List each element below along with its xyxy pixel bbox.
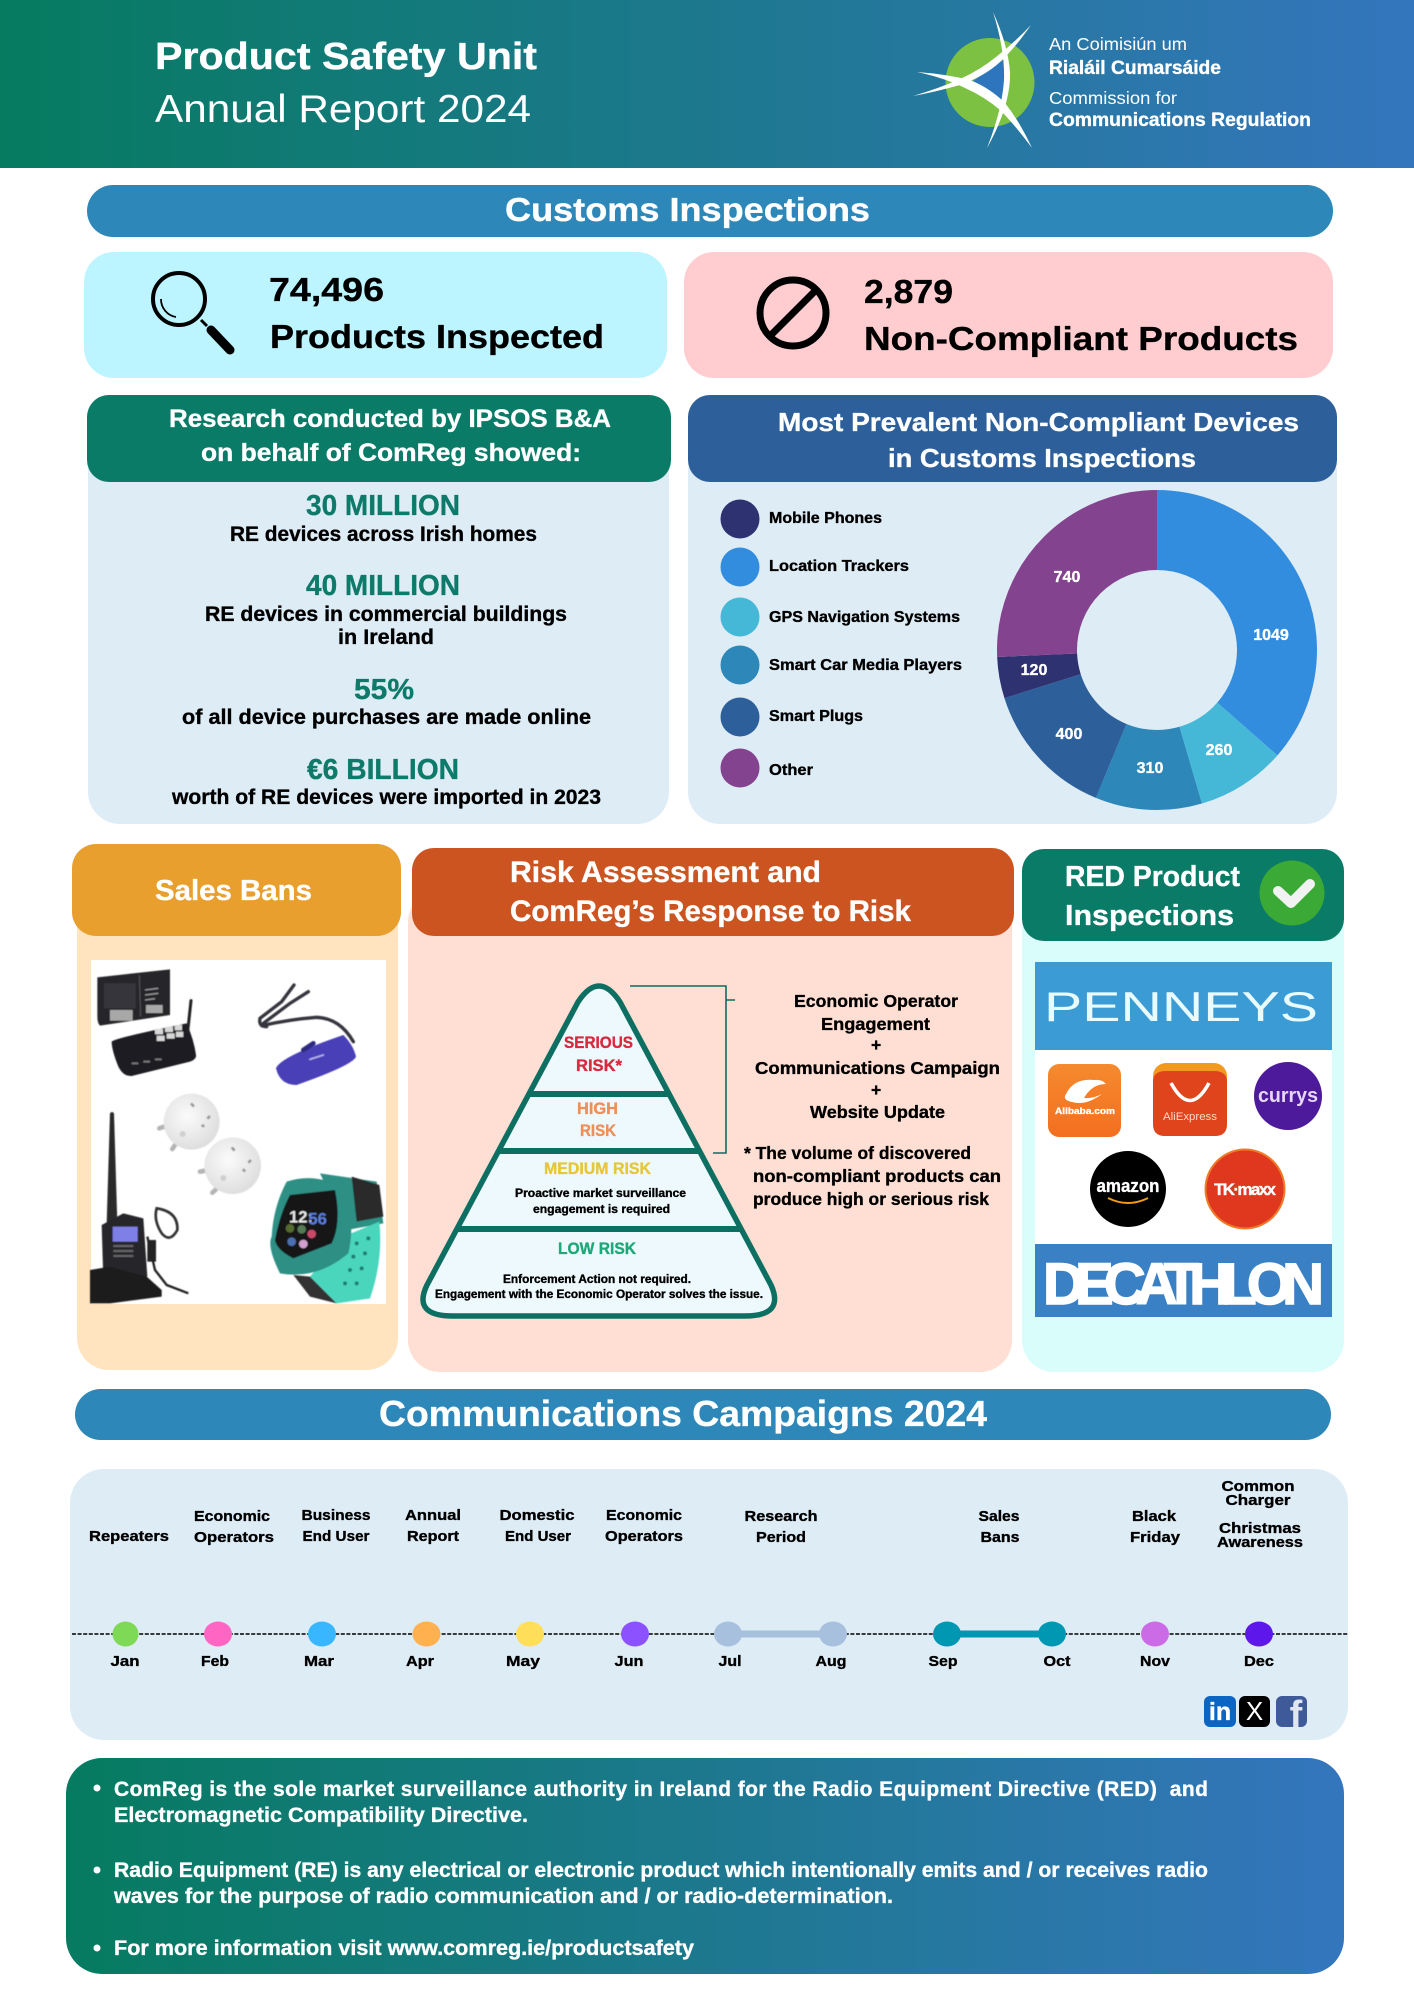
campaign labels: Economic [606,1507,682,1524]
risk response text: Communications Campaign [755,1058,1000,1078]
stat: 6 billion: €6 BILLION [307,754,459,786]
panel: most prevalent devices [688,395,1337,824]
campaign labels: Domestic [500,1507,574,1524]
campaign labels: Repeaters [89,1528,169,1545]
campaign labels: Report [407,1528,459,1545]
product photo collage [90,960,386,1304]
devices heading: Most Prevalent Non-Compliant Devices [778,407,1299,437]
stat: 6 billion [171,754,601,809]
bracket [630,986,735,1153]
icon: purple tracker with cable [260,985,356,1085]
campaign labels: Operators [605,1528,683,1545]
logo: Penneys [1035,962,1332,1050]
stat: 40 million [205,570,567,649]
section heading: Customs Inspections [87,185,1333,237]
logo: TK Maxx: TK·maxx [1214,1180,1277,1199]
serious risk [564,1034,633,1075]
title: Product Safety Unit [155,36,537,78]
social icons: in [1209,1698,1231,1726]
stat: 30 million: RE devices across Irish homes [230,523,537,546]
RED heading [1022,849,1344,941]
campaign labels: Period [756,1529,806,1546]
campaign labels: Black [1132,1508,1177,1525]
risk response text: + [871,1080,881,1100]
donut chart: 1049 [1253,627,1289,644]
month labels: Mar [304,1653,334,1670]
bullet: sole authority: Electromagnetic Compatibility Directive. [114,1804,528,1827]
icon: smart plugs [159,1094,261,1194]
medium risk: MEDIUM RISK [544,1160,651,1178]
legend: Mobile Phones [769,510,882,527]
logo: Penneys: PENNEYS [1044,983,1318,1030]
panel: campaign timeline [70,1469,1348,1740]
risk heading [412,848,1014,936]
campaign labels: Economic [194,1508,270,1525]
risk response text [755,991,1000,1122]
legend: Smart Car Media Players [769,657,962,674]
campaign labels: Business [302,1507,370,1524]
bullet: radio equipment definition: waves for the purpose of radio communication and / or radio-determination. [113,1885,893,1908]
devices heading [688,395,1337,482]
legend: Other [769,762,813,779]
risk response text: Engagement [821,1014,930,1034]
social icons [1204,1694,1307,1736]
campaign labels: End User [302,1528,370,1545]
subtitle: Annual Report 2024 [155,88,531,131]
research heading: Research conducted by IPSOS B&A [169,405,611,433]
RED heading: RED Product [1065,861,1241,893]
month labels [110,1653,1274,1670]
research heading: on behalf of ComReg showed: [201,439,581,467]
logo: Currys: currys [1258,1085,1318,1107]
month labels: Jul [718,1653,742,1670]
social icons: X [1246,1696,1263,1726]
stat: 40 million: 40 MILLION [306,570,460,602]
medium risk [515,1160,686,1216]
stat: 55 percent [182,674,591,729]
campaign labels: Research [744,1508,818,1525]
stat: 30 million [230,490,537,546]
icon: handheld radio [90,1112,188,1303]
month labels: Apr [406,1653,434,1670]
section heading: Communications Campaigns [75,1389,1331,1440]
timeline markers [112,1622,1273,1646]
month labels: Feb [201,1653,229,1670]
stat: 55 percent: 55% [354,674,414,706]
campaign labels: Awareness [1217,1534,1303,1551]
logo wordmark [1049,34,1311,131]
risk footnote: produce high or serious risk [753,1189,989,1209]
stat card: products inspected [84,252,667,378]
retailer logos [1035,962,1332,1317]
risk footnote [744,1143,1001,1209]
serious risk: SERIOUS [564,1034,633,1052]
logo: Currys [1254,1062,1322,1130]
low risk: LOW RISK [558,1240,636,1258]
research heading [87,395,671,482]
stat: 40 million: in Ireland [338,626,434,649]
low risk: Engagement with the Economic Operator solves the issue. [435,1289,763,1301]
stat: 30 million: 30 MILLION [306,490,460,522]
section heading: Customs Inspections: Customs Inspections [505,191,870,228]
campaign labels: Operators [194,1529,274,1546]
month labels: May [506,1653,541,1670]
low risk: Enforcement Action not required. [503,1274,691,1286]
donut chart: 310 [1137,760,1163,777]
stat card: non-compliant products: Non-Compliant Products [864,320,1298,357]
section heading: Communications Campaigns: Communications Campaigns 2024 [379,1393,987,1434]
logo: Amazon: amazon [1096,1176,1160,1196]
logo wordmark: An Coimisiún um [1049,34,1187,54]
month labels: Sep [928,1653,958,1670]
sales bans heading [72,844,401,936]
stat card: products inspected: Products Inspected [270,318,604,355]
icon: magnifying glass [153,273,230,350]
RED heading: Inspections [1065,900,1234,932]
campaign labels: Sales [978,1508,1020,1525]
campaign labels: Common [1222,1478,1294,1495]
campaign labels: Christmas [1219,1520,1301,1537]
icon: kids smartwatch: 56 [308,1209,327,1228]
logo: Alibaba [1048,1064,1121,1137]
donut chart: 120 [1021,662,1047,679]
stat card: products inspected: 74,496 [269,271,384,308]
logo: Amazon [1090,1151,1166,1227]
header banner [0,0,1414,168]
bullet: sole authority: ComReg is the sole market surveillance authority in Ireland for the Radio Equipment Directive (RED) and [114,1778,1208,1801]
logo wordmark: Rialáil Cumarsáide [1049,58,1221,79]
risk heading: Risk Assessment and [510,856,821,889]
campaign labels: End User [505,1528,571,1545]
sales bans heading: Sales Bans [155,875,312,907]
campaign labels: Bans [980,1529,1020,1546]
risk response text: Economic Operator [794,991,958,1011]
stat: 55 percent: of all device purchases are made online [182,706,591,729]
risk pyramid [423,986,775,1316]
high risk [577,1100,618,1140]
campaign labels: Annual [405,1507,461,1524]
high risk: RISK [580,1122,616,1140]
month labels: Jun [614,1653,644,1670]
devices heading: in Customs Inspections [888,443,1196,473]
serious risk: RISK* [576,1057,623,1075]
high risk: HIGH [577,1100,618,1118]
panel: RED product inspections [1022,849,1344,1372]
panel: key information [66,1758,1344,1974]
campaign labels: Friday [1130,1529,1181,1546]
logo: Alibaba: Alibaba.com [1055,1106,1115,1117]
risk footnote: non-compliant products can [753,1166,1001,1186]
month labels: Oct [1044,1653,1070,1670]
icon: intercom units [97,969,196,1076]
timeline line [72,1633,1348,1635]
social icons: f [1290,1694,1303,1736]
panel: risk assessment [408,848,1014,1372]
stat: 40 million: RE devices in commercial buildings [205,603,567,626]
icon: prohibition sign [760,280,826,346]
campaign labels: Charger [1226,1492,1291,1509]
logo wordmark: Commission for [1049,88,1177,108]
bullet: more information: For more information visit www.comreg.ie/productsafety [114,1937,694,1960]
risk footnote: * The volume of discovered [744,1143,971,1163]
campaign labels [89,1478,1303,1551]
bullet: radio equipment definition: Radio Equipment (RE) is any electrical or electronic product which intentionally emits and / or receives radio [114,1859,1208,1882]
icon: ComReg logo [913,12,1034,148]
medium risk: Proactive market surveillance [515,1188,686,1200]
legend: GPS Navigation Systems [769,609,960,626]
stat: 6 billion: worth of RE devices were imported in 2023 [171,786,601,809]
legend: Location Trackers [769,558,909,575]
legend [720,500,962,788]
month labels: Jan [110,1653,140,1670]
month labels: Aug [816,1653,846,1670]
icon: check mark [1260,860,1324,926]
donut chart: 260 [1206,742,1232,759]
logo wordmark: Communications Regulation [1049,110,1311,131]
panel: research [87,395,671,824]
month labels: Dec [1244,1653,1274,1670]
legend: Smart Plugs [769,708,863,725]
donut chart [1021,530,1289,777]
risk heading: ComReg’s Response to Risk [510,895,911,928]
medium risk: engagement is required [533,1204,670,1216]
bullet: radio equipment definition [94,1859,1208,1908]
panel: sales bans [72,844,401,1370]
risk response text: + [871,1035,881,1055]
logo: Decathlon: DECATHLON [1043,1252,1324,1317]
risk response text: Website Update [810,1102,945,1122]
logo: AliExpress [1153,1063,1227,1136]
stat card: non-compliant products: 2,879 [864,273,953,310]
low risk [435,1240,763,1301]
logo: TK Maxx [1206,1150,1284,1228]
icon: kids smartwatch [270,1173,383,1303]
donut chart: 400 [1056,726,1082,743]
logo: AliExpress: AliExpress [1163,1111,1218,1123]
icon: kids smartwatch: 12: [289,1208,313,1227]
stat card: non-compliant products [684,252,1333,378]
bullet: sole authority [94,1778,1208,1827]
month labels: Nov [1140,1653,1171,1670]
donut chart: 740 [1054,569,1080,586]
